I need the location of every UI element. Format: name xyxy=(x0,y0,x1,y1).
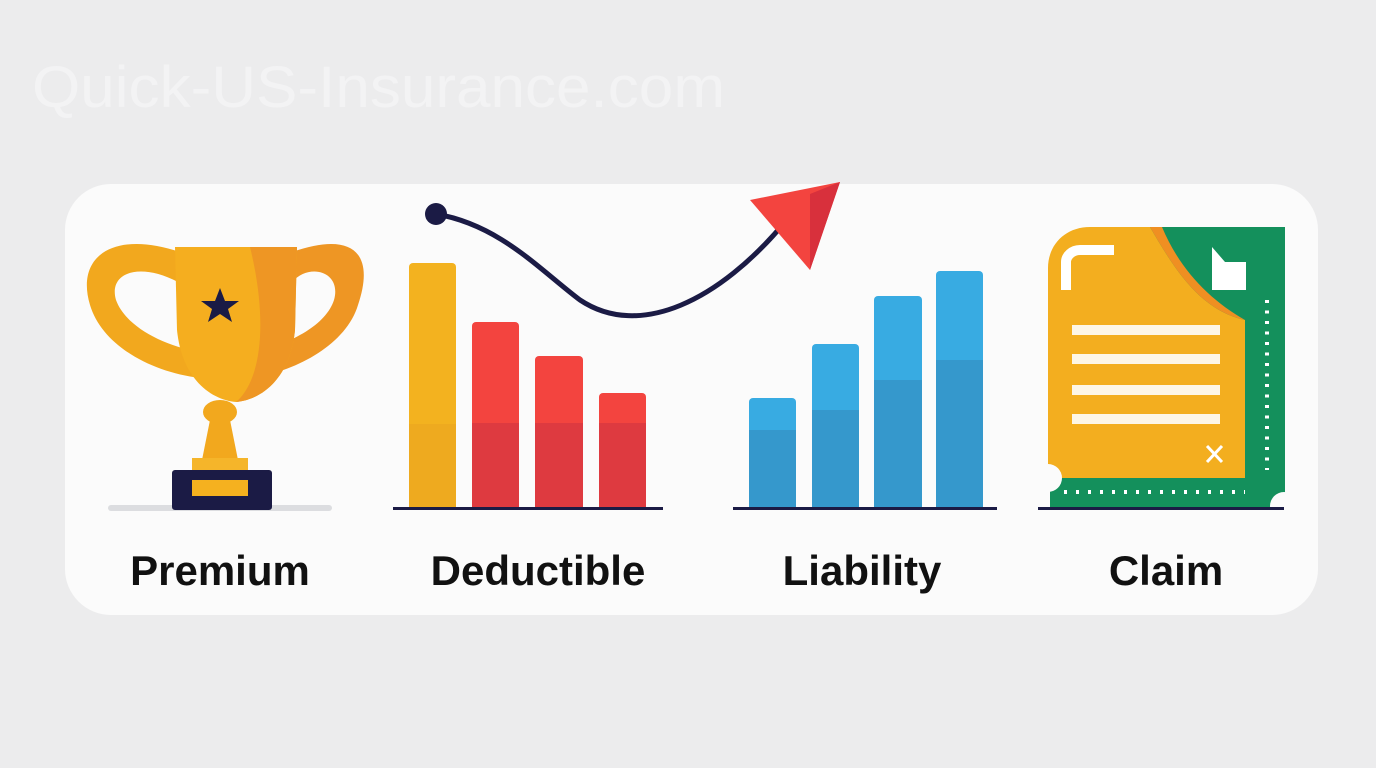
chart: deductible bars xyxy=(393,263,663,510)
label: Deductible: Deductible xyxy=(431,547,645,594)
icon: trophy xyxy=(87,244,364,511)
chart: liability bars xyxy=(733,271,997,510)
watermark: Quick-US-Insurance.com xyxy=(32,55,725,120)
label: Claim: Claim xyxy=(1109,547,1223,594)
label: Liability: Liability xyxy=(783,547,942,594)
label: Premium: Premium xyxy=(130,547,310,594)
icon: claim document xyxy=(1034,227,1298,520)
arrow: trend curve xyxy=(425,182,840,316)
icon: star xyxy=(201,288,239,322)
panel xyxy=(65,182,1318,615)
